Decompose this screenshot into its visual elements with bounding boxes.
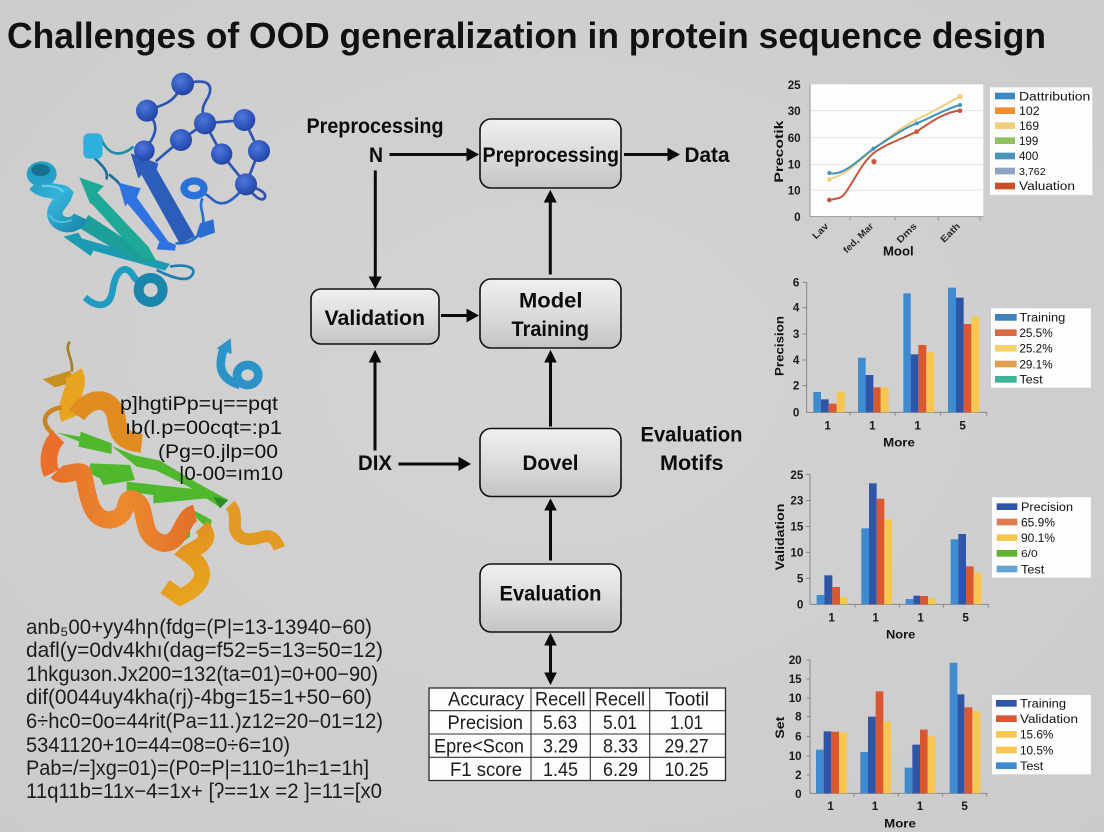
formula text block: Pab=/=]xg=01)=(P0=P|=110=1h=1=1h] [26, 757, 369, 780]
arrow: Dovel to Model Training [545, 351, 556, 426]
y axis ticks: 15 [790, 520, 804, 533]
x axis tick labels [828, 611, 969, 624]
y axis ticks: 23 [790, 495, 804, 508]
illustration: blue-teal protein structure [27, 73, 270, 305]
legend: 29.1% [1019, 357, 1053, 371]
box: Validation: Validation [324, 307, 425, 330]
box: Model Training [480, 279, 621, 348]
metrics table: 5.63 [543, 713, 577, 734]
legend [992, 497, 1091, 578]
x axis tick labels: 5 [959, 419, 966, 432]
line series: teal [827, 103, 962, 175]
plot area [810, 84, 983, 217]
label: DIX: DIX [358, 452, 392, 475]
y axis ticks: 10 [789, 750, 802, 763]
box: Validation [311, 289, 439, 344]
bar chart: Validation vs Nore [773, 469, 1091, 641]
x axis tick labels [824, 419, 966, 432]
legend: Test [1020, 759, 1044, 773]
formula text block: 11q11b=11x−4=1x+ [ʔ==1x =2 ]=11=[x0 [26, 780, 382, 803]
axis titles: Set [773, 717, 787, 739]
y axis ticks: 5 [797, 572, 804, 585]
axis titles: Precotik [772, 120, 786, 183]
axis titles: Validation [773, 504, 787, 570]
line series: red [827, 108, 962, 202]
box: Model Training: Model [519, 290, 582, 312]
arrow: DIX to Dovel [399, 458, 470, 470]
box: Model Training: Training [512, 318, 589, 341]
axis titles: More [883, 436, 915, 450]
legend: Training [1020, 697, 1066, 711]
x axis tick labels: 1 [914, 419, 921, 432]
legend: Valuation [1019, 179, 1075, 193]
y axis ticks: 10 [790, 546, 803, 559]
y axis ticks [788, 79, 801, 224]
y axis ticks: 6 [795, 731, 802, 744]
label: Evaluation Motifs [640, 424, 742, 475]
y axis ticks [790, 469, 804, 611]
axes [806, 474, 989, 608]
y axis ticks [793, 276, 800, 419]
cyan helix upper [27, 161, 81, 225]
box: Evaluation [480, 564, 621, 632]
bars [816, 663, 980, 793]
arrow: Validation to Model Training [442, 310, 478, 322]
blue spheres [134, 73, 270, 195]
line series: yellow [827, 94, 963, 182]
formula text block: 6÷hc0=0o=44rit(Pa=11.)z12=20−01=12) [26, 710, 383, 733]
y axis ticks: 60 [788, 132, 801, 145]
garbled text overlay on protein: ıb(l.p=00cqt=:p1 [125, 418, 282, 439]
metrics table: Recell [535, 690, 586, 710]
y axis ticks: 0 [793, 406, 799, 419]
box: Preprocessing [480, 119, 621, 188]
x axis tick labels: 5 [961, 800, 968, 813]
metrics table: F1 score [450, 760, 522, 781]
legend: 65.9% [1021, 515, 1055, 529]
garbled text overlay on protein: (Pg=0.jlp=00 [158, 442, 278, 463]
metrics table: Recell [595, 690, 645, 710]
orange helix ribbons [43, 342, 279, 597]
metrics table: 29.27 [664, 736, 708, 758]
axis titles: Precision [772, 316, 786, 376]
axes [803, 282, 987, 416]
y axis ticks: 3 [793, 328, 800, 341]
legend: 400 [1019, 149, 1039, 163]
formula text block: 1hkguɜon.Jx200=132(ta=01)=0+00−90) [26, 663, 378, 686]
arrow: Evaluation to table, double headed [545, 634, 556, 684]
y axis ticks: 10 [788, 159, 801, 172]
illustration: orange-green protein structure [43, 338, 279, 597]
small blue strand head [197, 219, 215, 238]
garbled text overlay on protein [120, 394, 283, 485]
x axis tick labels: 1 [869, 419, 876, 432]
bars [817, 483, 981, 604]
x axis tick labels: 1 [917, 611, 924, 624]
y axis ticks: 25 [788, 79, 801, 92]
legend: 169 [1019, 119, 1039, 133]
small blue ring [184, 181, 204, 196]
metrics table: Tootil [665, 690, 709, 710]
x axis tick labels: 1 [828, 611, 835, 624]
legend: 102 [1019, 104, 1040, 118]
x axis tick labels: Eath [939, 221, 962, 245]
axis titles [772, 316, 915, 450]
legend: 10.5% [1020, 743, 1054, 757]
formula text block [26, 616, 383, 803]
bar chart: Set vs More [773, 654, 1091, 831]
arrow: Evaluation to Dovel [545, 500, 556, 560]
x axis tick labels [810, 220, 962, 255]
y axis ticks: 0 [797, 598, 803, 611]
metrics table [429, 688, 726, 781]
legend: Test [1019, 373, 1043, 387]
teal beta strands [63, 177, 170, 271]
line chart: Precotik vs Mool [772, 79, 1092, 259]
bar chart: Precision vs More [772, 276, 1091, 450]
x axis tick labels: 1 [827, 800, 834, 813]
arrow: Preprocessing to Data [624, 148, 679, 160]
legend [990, 87, 1092, 195]
x axis tick labels: Dms [895, 221, 919, 245]
x axis tick labels: fed, Mar [841, 221, 876, 255]
y axis ticks: 15 [789, 673, 802, 686]
legend: 199 [1019, 134, 1039, 148]
y axis ticks [789, 654, 802, 801]
metrics table: Accuracy [448, 690, 524, 710]
x axis tick labels: 1 [872, 800, 879, 813]
arrow: N down to Validation [370, 171, 381, 288]
x axis tick labels: 1 [824, 419, 831, 432]
y axis ticks: 2 [795, 769, 802, 782]
metrics table: 3.29 [543, 736, 578, 758]
legend: 3,762 [1019, 167, 1046, 178]
formula text block: anb₅00+yy4hր(fdg=(P|=13-13940−60) [26, 616, 372, 639]
arrow: DIX to Validation [370, 351, 380, 450]
formula text block: dif(0044uy4kha(rj)-4bg=15=1+50−60) [26, 686, 372, 709]
legend: Dattribution [1019, 89, 1090, 103]
arrow: N to Preprocessing [390, 148, 478, 160]
metrics table: Precision [448, 713, 523, 734]
y axis ticks: 25 [790, 469, 804, 482]
garbled text overlay on protein: |0-00=ım10 [179, 464, 283, 485]
label: N: N [369, 144, 383, 167]
metrics table: Epre<Scon [434, 736, 524, 758]
formula text block: dafl(y=0dv4khı(dag=f52=5=13=50=12) [26, 639, 383, 662]
label: Preprocessing: Preprocessing [306, 115, 444, 138]
legend: 15.6% [1020, 728, 1054, 742]
metrics table: 10.25 [664, 760, 708, 781]
legend [992, 695, 1091, 774]
label: Evaluation Motifs: Motifs [660, 452, 724, 475]
y axis ticks: 30 [788, 105, 801, 118]
mid blue beta strand [118, 183, 176, 251]
legend: Precision [1021, 500, 1073, 514]
y axis ticks: 20 [789, 654, 802, 667]
y axis ticks: 10 [788, 184, 801, 197]
small blue ribbon [217, 338, 258, 385]
arrow: Model Training to Preprocessing [544, 191, 556, 274]
cyan lower helix [85, 266, 193, 305]
axis titles: More [884, 817, 916, 831]
dark blue beta strand [131, 153, 195, 244]
y axis ticks: 10 [789, 692, 802, 705]
metrics table: 1.45 [543, 760, 578, 781]
legend: 6/0 [1021, 549, 1038, 560]
metrics table: 1.01 [670, 713, 703, 734]
y axis ticks: 4 [793, 302, 800, 315]
legend: Test [1021, 562, 1045, 576]
metrics table: 5.01 [603, 713, 637, 734]
label: Data: Data [684, 144, 730, 167]
protein loops and bonds [95, 82, 265, 243]
box: Evaluation: Evaluation [500, 582, 602, 606]
bars [813, 288, 979, 412]
axis titles: Nore [886, 627, 915, 641]
axis titles [772, 120, 914, 259]
axis titles [773, 717, 916, 831]
box: Preprocessing: Preprocessing [482, 144, 619, 167]
metrics table: 8.33 [603, 736, 638, 758]
legend: 25.2% [1019, 342, 1053, 356]
x axis tick labels [827, 800, 968, 813]
y axis ticks: 8 [795, 711, 802, 724]
y axis ticks: 2 [793, 380, 800, 393]
legend [991, 308, 1091, 388]
x axis tick labels: 5 [962, 611, 969, 624]
axes [807, 660, 987, 797]
y axis ticks: 4 [793, 354, 800, 367]
y axis ticks: 0 [794, 211, 801, 224]
x axis tick labels: 1 [917, 800, 924, 813]
y axis ticks: 6 [793, 276, 800, 289]
axis titles [773, 504, 915, 641]
label: Evaluation Motifs: Evaluation [640, 424, 742, 446]
box: Dovel [480, 428, 621, 496]
legend: Validation [1020, 712, 1078, 726]
box: Dovel: Dovel [522, 452, 578, 475]
title: Challenges of OOD generalization in protein sequence design [7, 15, 1046, 56]
flow diagram [306, 115, 742, 684]
metrics table: 6.29 [603, 760, 638, 781]
green beta strands [57, 432, 228, 542]
legend: 90.1% [1021, 531, 1055, 545]
x axis tick labels: 1 [872, 611, 879, 624]
x axis tick labels: Lav [810, 220, 831, 241]
formula text block: 5341120+10=44=08=0÷6=10) [26, 734, 290, 757]
legend: 25.5% [1019, 326, 1053, 340]
garbled text overlay on protein: p]hgtiPp=ɥ==pqt [120, 394, 279, 415]
y axis ticks: 0 [795, 788, 802, 801]
legend: Training [1019, 311, 1065, 325]
axis titles: Mool [883, 244, 914, 259]
cyan small helix [83, 133, 103, 159]
